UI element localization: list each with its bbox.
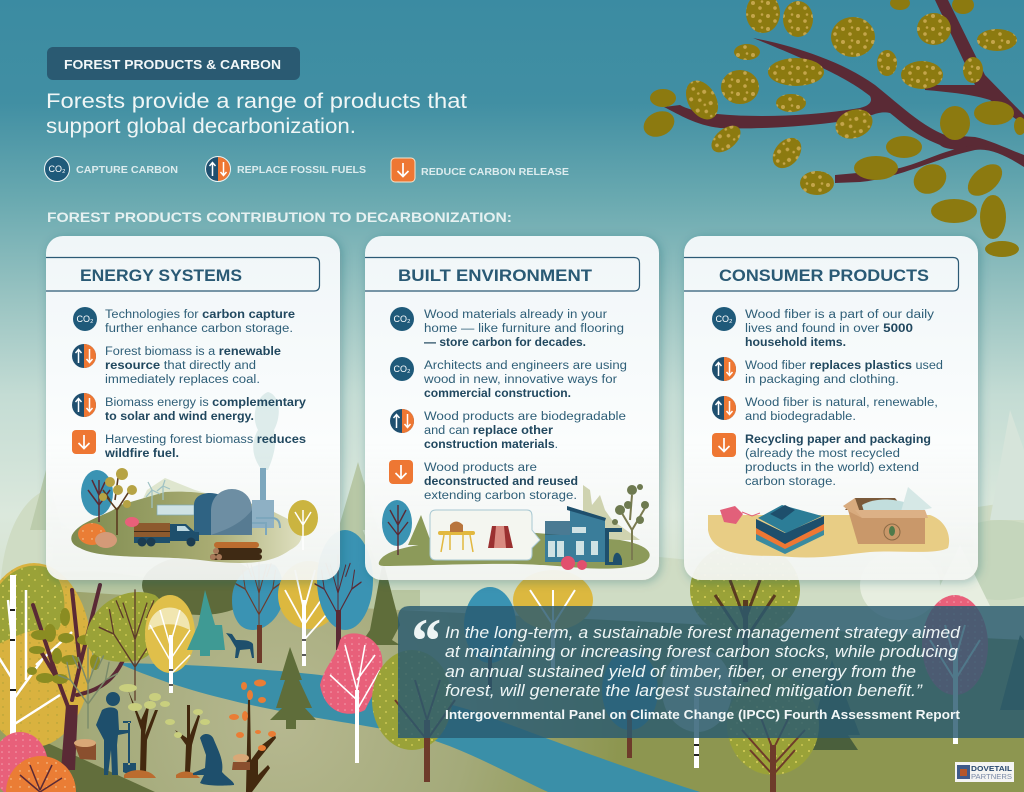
illustration: wood house and furniture: [379, 484, 650, 570]
maroon tree with leaves: [27, 585, 130, 770]
item: daily lives: CO₂: [716, 314, 733, 324]
heading: built environment: [365, 258, 640, 291]
blue tree under quote: [464, 587, 516, 690]
person with shovel: [96, 692, 136, 775]
headline: support global decarbonization.: [46, 115, 356, 138]
birch mid trunk: [662, 648, 732, 768]
back forest hill: [142, 555, 258, 615]
quote text: at maintaining or increasing forest carbon stocks, while producing: [445, 643, 959, 661]
olive tree lower: [727, 675, 819, 792]
tree teal: [382, 500, 412, 555]
illustration: clothes and box: [708, 487, 949, 557]
legend: [44, 156, 569, 182]
branch shape: [664, 0, 1024, 183]
quote panel: [398, 605, 1024, 738]
illustration: biomass energy plant: [71, 468, 318, 563]
legend: reduce carbon release: [391, 158, 569, 182]
item: recycling: Recycling paper and packaging: [745, 434, 931, 446]
legend: capture carbon: CO₂: [48, 164, 66, 174]
logo: [955, 762, 1014, 782]
dark conifer: [360, 560, 400, 645]
quote text: forest, will generate the largest sustained mitigation benefit.”: [445, 682, 924, 700]
item: carbon capture: CO₂: [76, 314, 94, 324]
panel: consumer products: [684, 236, 978, 580]
item: biodegradable: [390, 409, 626, 451]
item: replaces plastics: Wood fiber replaces plastics used: [745, 360, 943, 372]
item: daily lives: household items.: [745, 337, 846, 349]
header tag: [47, 47, 300, 80]
section heading: FOREST PRODUCTS CONTRIBUTION TO DECARBONIZATION:: [47, 210, 512, 225]
panel: energy systems: [46, 236, 340, 580]
bushes: [78, 517, 139, 548]
item: architects: [390, 357, 627, 400]
item: wildfire fuel: [72, 430, 306, 460]
conifer olive: [270, 647, 316, 729]
small planted tree: [119, 684, 170, 778]
item: carbon capture: [73, 307, 295, 335]
item: deconstructed: extending carbon storage.: [424, 490, 577, 502]
orange leaf sapling: [229, 680, 276, 792]
callout bubble with furniture: [430, 510, 540, 560]
solar panel: [157, 505, 194, 515]
legend: capture carbon: CAPTURE CARBON: [76, 164, 178, 176]
log pile: [210, 542, 262, 560]
item: renewable resource: [72, 344, 281, 386]
headline: [46, 90, 467, 138]
birch tree large: [0, 563, 92, 770]
item: architects: commercial construction.: [424, 388, 571, 400]
tree right: [612, 484, 649, 560]
pale background hills and trees: [0, 410, 1024, 640]
item: carbon capture: further enhance carbon storage.: [105, 323, 293, 335]
price tag: [720, 506, 760, 524]
pink shrubs: [561, 556, 587, 570]
olive tree: [85, 590, 171, 700]
item: wood materials: [390, 307, 624, 349]
item: renewable resource: resource that directly and: [105, 360, 256, 372]
heading: energy systems: ENERGY SYSTEMS: [80, 267, 242, 285]
heading: consumer products: [684, 258, 958, 291]
item: complementary: [72, 393, 307, 423]
conifer right edge: [1000, 635, 1024, 710]
small back tree: [59, 648, 117, 728]
kneeling person: [193, 734, 234, 786]
item: renewable resource: immediately replaces coal.: [105, 374, 260, 386]
item: recycling: [712, 433, 931, 488]
heading: consumer products: CONSUMER PRODUCTS: [719, 267, 929, 285]
item: wood materials: Wood materials already in your: [424, 309, 607, 321]
item: complementary: Biomass energy is complementary: [105, 397, 307, 409]
item: complementary: to solar and wind energy.: [105, 411, 254, 423]
tree blue: [81, 470, 113, 522]
house: [545, 506, 622, 565]
legend: reduce carbon release: REDUCE CARBON RELEASE: [421, 166, 569, 178]
legend: replace fossil fuels: [206, 156, 366, 182]
second sapling: [165, 705, 210, 778]
item: deconstructed: [389, 460, 578, 502]
item: wood materials: home — like furniture and flooring: [424, 323, 624, 335]
deer: [226, 633, 254, 658]
cardboard box: [843, 487, 932, 544]
river: [118, 663, 700, 792]
pink maroon tree right: [922, 595, 988, 744]
birch under quote: [513, 570, 593, 670]
bushes bottom left: [0, 732, 76, 792]
item: biodegradable: Wood products are biodegradable: [424, 411, 626, 423]
item: carbon capture: Technologies for carbon capture: [105, 309, 295, 321]
item: natural: and biodegradable.: [745, 411, 856, 423]
item: recycling: products in the world) extend: [745, 462, 919, 474]
icon: quote mark: “: [408, 605, 440, 676]
teal conifer: [187, 590, 225, 656]
quote text: an annual sustained yield of timber, fiber, or energy from the: [445, 663, 916, 681]
item: biodegradable: construction materials .: [424, 439, 558, 451]
round storage tanks and chimney: [194, 468, 280, 535]
header tag: FOREST PRODUCTS & CARBON: [64, 57, 281, 72]
panel: built environment: [365, 236, 659, 580]
item: recycling: carbon storage.: [745, 476, 836, 488]
tree birch yellow: [288, 500, 318, 550]
forest scene: [0, 530, 1024, 792]
item: wildfire fuel: Harvesting forest biomass reduces: [105, 434, 306, 446]
item: natural: Wood fiber is natural, renewable,: [745, 397, 938, 409]
branch top right: [639, 0, 1024, 257]
heading: built environment: BUILT ENVIRONMENT: [398, 267, 592, 285]
item: daily lives: lives and found in over 5000: [745, 323, 913, 335]
item: architects: wood in new, innovative ways for: [423, 374, 617, 386]
item: wood materials: CO₂: [394, 314, 411, 324]
smoke: [253, 392, 279, 470]
logo: DOVETAIL: [971, 764, 1012, 773]
logging truck: [134, 523, 199, 546]
leaves: [679, 0, 1017, 195]
ground: [0, 590, 1024, 792]
item: deconstructed: Wood products are: [424, 462, 537, 474]
heading: energy systems: [46, 258, 320, 291]
birch small: [145, 595, 195, 693]
dark conifer right: [800, 660, 860, 750]
logo: PARTNERS: [971, 772, 1012, 781]
legend: replace fossil fuels: REPLACE FOSSIL FUELS: [237, 164, 366, 176]
item: renewable resource: Forest biomass is a renewable: [105, 346, 281, 358]
legend: capture carbon: [44, 156, 178, 182]
blue maroon tree: [315, 530, 373, 650]
folded clothes: [756, 505, 824, 554]
item: deconstructed: deconstructed and reused: [424, 476, 578, 488]
birch yellow: [278, 561, 340, 666]
wind turbines: [146, 480, 170, 508]
blue tree: [232, 555, 283, 663]
item: wildfire fuel: wildfire fuel.: [104, 448, 179, 460]
olive tree under quote: [372, 650, 455, 782]
pink tree: [320, 633, 382, 763]
item: recycling: (already the most recycled: [745, 448, 900, 460]
dark hillside: [30, 735, 155, 792]
quote text: In the long-term, a sustainable forest management strategy aimed: [445, 624, 961, 642]
small conifer: [408, 515, 432, 545]
blue tree mid: [602, 650, 658, 758]
quote source: Intergovernmental Panel on Climate Change (IPCC) Fourth Assessment Report: [445, 707, 961, 722]
item: wood materials: — store carbon for decades.: [424, 337, 586, 349]
item: architects: Architects and engineers are using: [424, 360, 627, 372]
olive tree top: [690, 542, 800, 682]
tree branching: [99, 468, 137, 535]
item: daily lives: [712, 307, 934, 349]
pale trees far right: [860, 545, 990, 620]
item: natural: [712, 396, 938, 423]
item: architects: CO₂: [394, 364, 411, 374]
headline: Forests provide a range of products that: [46, 90, 467, 113]
item: daily lives: Wood fiber is a part of our daily: [745, 309, 934, 321]
tree stumps: [74, 739, 250, 770]
item: replaces plastics: in packaging and clothing.: [745, 374, 899, 386]
item: replaces plastics: [712, 357, 943, 386]
quote text: [445, 624, 961, 700]
item: biodegradable: and can replace other: [424, 425, 554, 437]
